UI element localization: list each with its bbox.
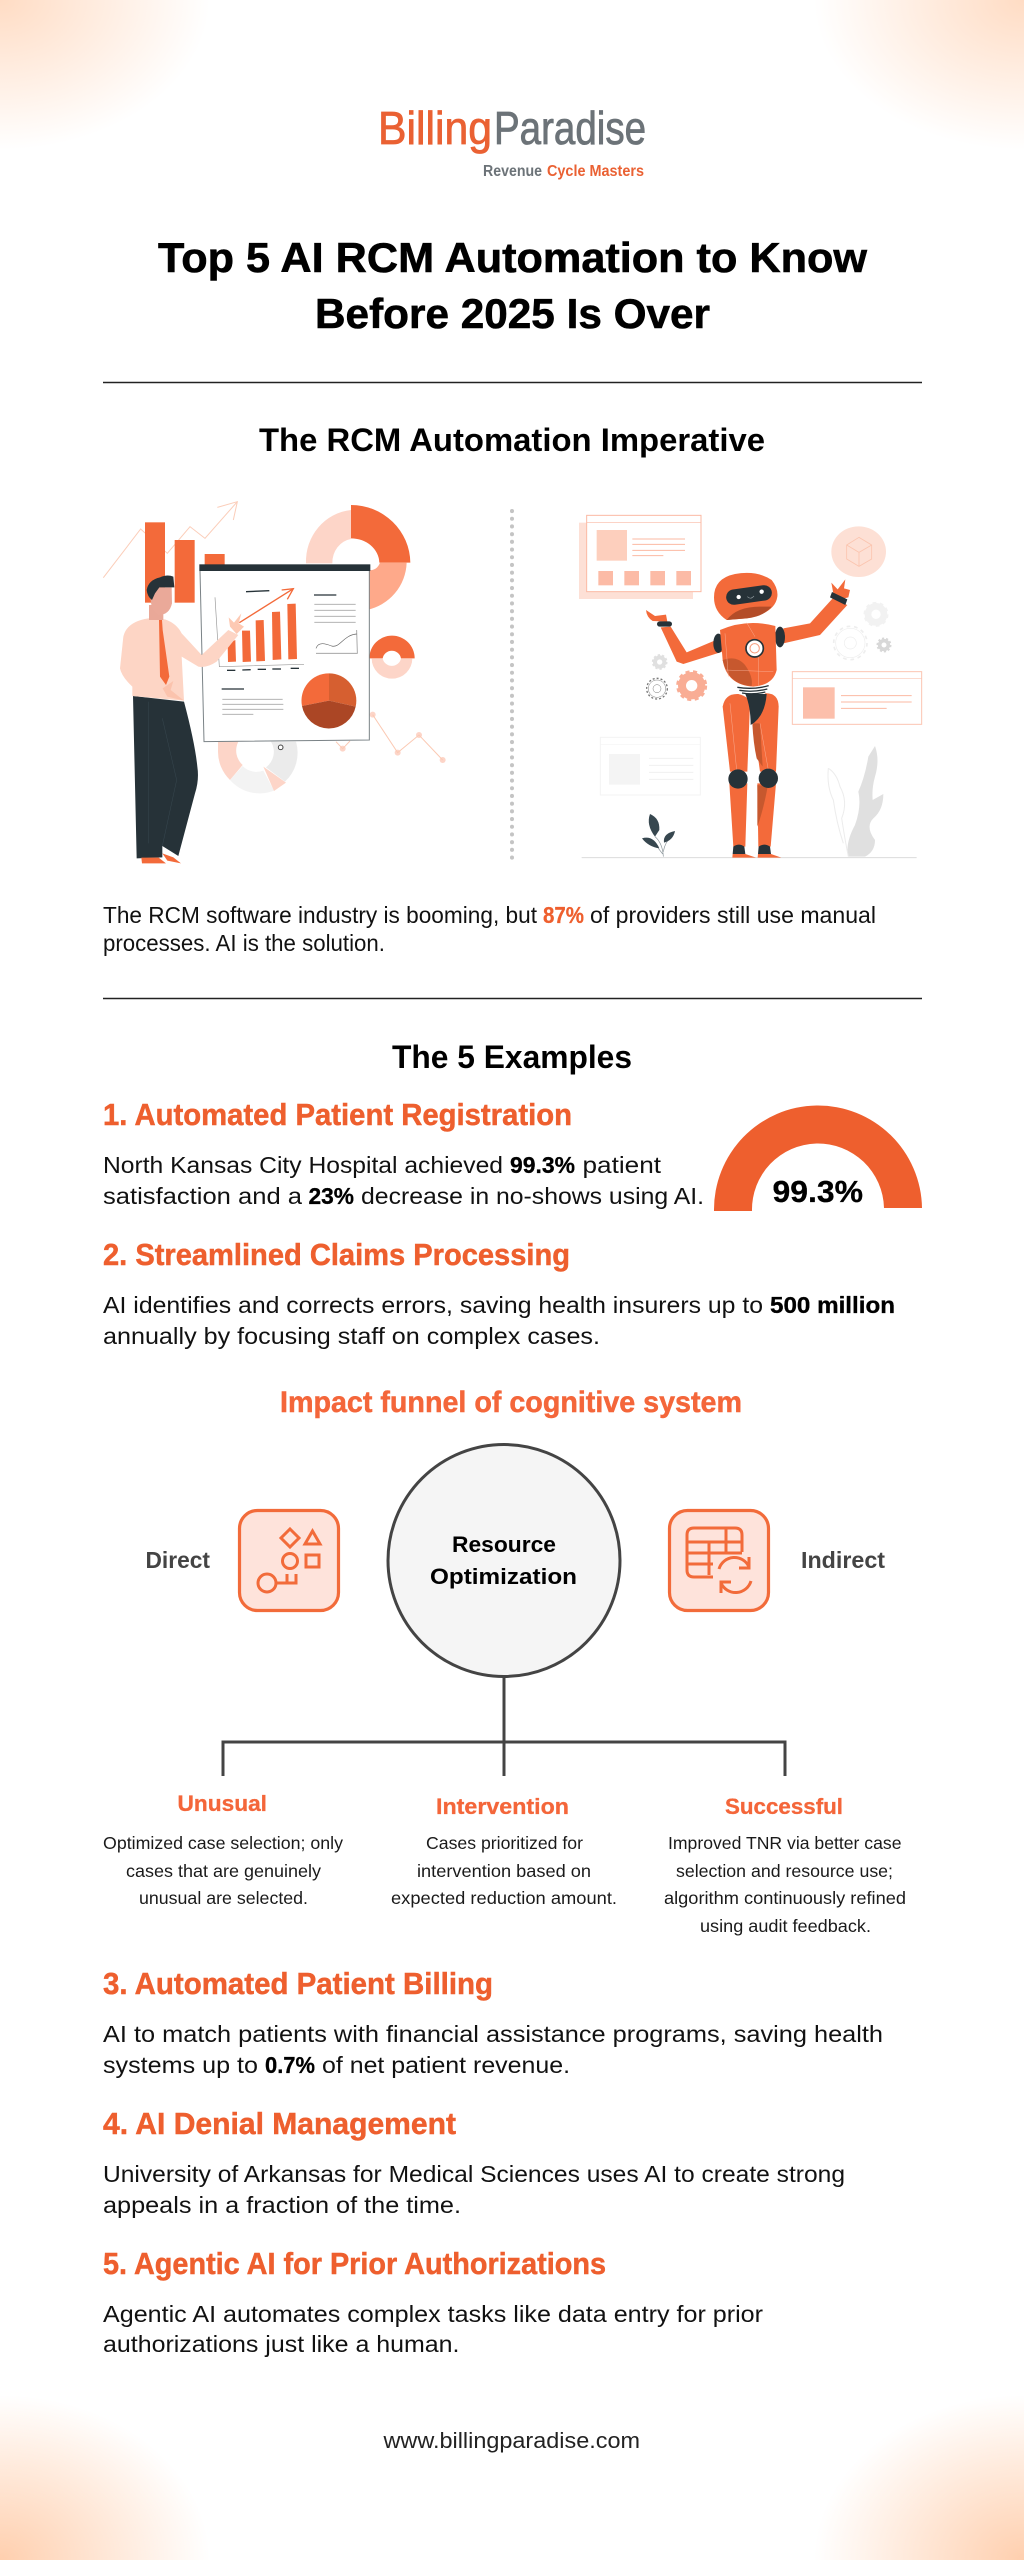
text block: example 3: AI to match patients with financial assistance programs, saving health [103,2021,883,2047]
text block: example 5: Agentic AI automates complex tasks like data entry for prior [103,2301,763,2327]
heading: impact funnel: Impact funnel of cognitive system [280,1386,742,1419]
text block: example 2 [103,1292,895,1349]
column: Successful: Successful [725,1794,843,1819]
text block: example 4 [103,2161,845,2218]
text block: example 2: AI identifies and corrects errors, saving health insurers up to [103,1292,763,1318]
text block: example 4: appeals in a fraction of the time. [103,2192,461,2218]
text block: example 3: 0.7% [265,2052,315,2078]
text block: example 1: North Kansas City Hospital achieved [103,1152,503,1178]
text block: example 3: of net patient revenue. [322,2052,570,2078]
column: Successful: algorithm continuously refined [664,1888,906,1908]
column: Successful: selection and resource use; [676,1861,893,1881]
logo: BillingParadise [378,102,646,180]
text block: example 1: 23% [308,1183,354,1209]
title: Before 2025 Is Over [315,290,710,337]
column: Successful: using audit feedback. [700,1916,871,1936]
text block: example 5: authorizations just like a human. [103,2331,460,2357]
text block: example 1: 99.3% [510,1152,575,1178]
column: Unusual: Unusual [178,1791,267,1816]
column: Intervention: intervention based on [417,1861,591,1881]
text block: example 1: patient [582,1152,662,1178]
heading: The RCM Automation Imperative: The RCM Automation Imperative [259,422,765,458]
text block: RCM intro: of providers still use manual [590,902,876,928]
text block: RCM intro: 87% [543,902,584,928]
column: Intervention: Intervention [436,1794,569,1819]
footer: website: www.billingparadise.com [382,2428,640,2453]
label: Indirect: Indirect [801,1547,885,1573]
text block: example 1: satisfaction and a [103,1183,302,1209]
connector tree [223,1677,785,1776]
column: Successful [664,1794,906,1936]
title: Top 5 AI RCM Automation to Know [158,234,867,281]
text block: example 3: systems up to [103,2052,258,2078]
column: Intervention [391,1794,617,1908]
illustration: robot with windows and gears [579,515,922,858]
text block: example 1 [103,1152,704,1209]
text block: RCM intro: processes. AI is the solution. [103,930,385,956]
divider: dotted [510,511,514,860]
circle: Resource Optimization: Optimization [430,1564,577,1589]
column: Unusual [103,1791,343,1908]
text block: example 2: annually by focusing staff on complex cases. [103,1323,600,1349]
heading: example 1: 1. Automated Patient Registration [103,1097,572,1132]
column: Intervention: expected reduction amount. [391,1888,617,1908]
title [158,234,867,337]
gauge: 99.3% [714,1105,922,1211]
logo: BillingParadise: Revenue [483,163,542,180]
circle: Resource Optimization: Resource [452,1532,556,1557]
text block: RCM intro: The RCM software industry is booming, but [103,902,538,928]
text block: example 5 [103,2301,763,2357]
logo: BillingParadise: Paradise [494,102,646,154]
text block: example 1: decrease in no-shows using AI. [361,1183,704,1209]
column: Successful: Improved TNR via better case [668,1833,902,1853]
heading: example 3: 3. Automated Patient Billing [103,1966,493,2001]
text block: example 4: University of Arkansas for Medical Sciences uses AI to create strong [103,2161,845,2187]
icon: table with refresh [670,1510,768,1610]
column: Unusual: Optimized case selection; only [103,1833,343,1853]
gauge: 99.3%: 99.3% [772,1174,863,1209]
logo: BillingParadise: Cycle Masters [547,163,644,180]
column: Unusual: cases that are genuinely [126,1861,321,1881]
label: Direct: Direct [146,1547,210,1573]
column: Intervention: Cases prioritized for [426,1833,583,1853]
circle: Resource Optimization [388,1444,620,1676]
text block: example 3 [103,2021,883,2078]
text block: example 2: 500 million [770,1292,895,1318]
heading: example 2: 2. Streamlined Claims Processing [103,1237,570,1272]
icon: shapes and key [240,1510,338,1610]
heading: The 5 Examples: The 5 Examples [392,1039,632,1075]
column: Unusual: unusual are selected. [139,1888,308,1908]
text block: RCM intro [103,902,876,956]
heading: example 4: 4. AI Denial Management [103,2106,456,2141]
logo: BillingParadise: Billing [378,102,492,154]
heading: example 5: 5. Agentic AI for Prior Authorizations [103,2246,606,2281]
illustration: presenter with chart board [103,502,446,863]
